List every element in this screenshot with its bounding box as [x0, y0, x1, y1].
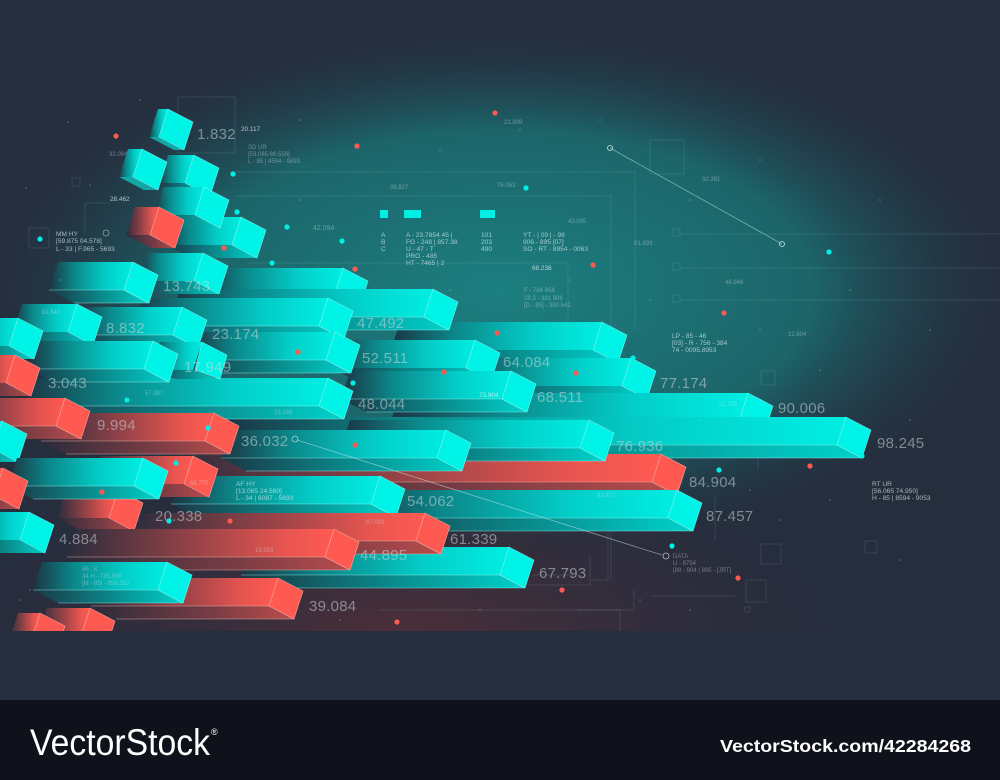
value labels: 19.583: [255, 548, 274, 554]
small labels: 28.462: [110, 196, 130, 203]
small labels: L - 85 | 4594 - 9893: [248, 159, 301, 165]
value labels: 39.084: [309, 598, 356, 615]
small labels: RT UR: [872, 481, 892, 488]
bar 36.032: [221, 430, 471, 471]
text block: data table: 490: [481, 246, 492, 253]
value labels: [M - 85] - 896.552: [82, 581, 130, 587]
bar 81.643: [18, 304, 102, 341]
small labels: 21.899: [504, 120, 523, 126]
text block: data table: HT - 7465 | 2: [406, 260, 445, 267]
value labels: 54.062: [407, 493, 454, 510]
value labels: 1.832: [197, 126, 236, 143]
value labels: 9.994: [97, 417, 136, 434]
cube stack 2: [119, 149, 167, 190]
value labels: [13.065 24.560]: [236, 488, 282, 495]
cube stack 4: [154, 187, 229, 228]
bar rear upper short: [166, 217, 266, 258]
bottom red bar 1: [38, 608, 115, 649]
value labels: 61.339: [450, 531, 497, 548]
footer bar: [0, 700, 1000, 780]
bar 47.492: [171, 289, 458, 330]
value labels: 34 H - 785.906: [82, 574, 122, 580]
value labels: 67.003: [366, 520, 385, 526]
red data dots: [99, 110, 813, 625]
small labels: L - 33 | F.965 - 5693: [56, 246, 115, 253]
connector line data callout: [103, 230, 669, 559]
value labels: 13.743: [163, 278, 210, 295]
cyan data dots: [37, 171, 865, 549]
value labels: 52.511: [362, 350, 408, 367]
value labels: 81.643: [42, 310, 61, 316]
bar 3.043 top: [28, 341, 178, 382]
bar rear upper: [221, 268, 368, 289]
value labels: 84.904: [689, 474, 736, 491]
small labels: LP - 85 - 46: [672, 333, 707, 340]
small labels: 32.261: [702, 177, 721, 183]
value labels: 67.793: [539, 565, 586, 582]
value labels: 57.997: [145, 391, 164, 397]
small labels: DATA: [673, 554, 688, 560]
small labels: 74 - 0095.8953: [672, 347, 717, 354]
small labels: MM HY: [56, 231, 79, 238]
bar 20: [394, 322, 628, 358]
footer registered mark: ®: [211, 727, 218, 737]
red cube: [126, 207, 184, 248]
small labels: SD UR: [248, 145, 267, 151]
value labels: 90.006: [778, 400, 825, 417]
red cube left edge: [0, 355, 40, 396]
text block: data table: 101: [481, 232, 492, 239]
bar 54.062: [171, 476, 405, 517]
small labels: [53.085 86.550]: [248, 152, 290, 158]
bar 48.044: [24, 378, 353, 419]
value labels: 47.492: [357, 315, 404, 332]
footer logo: VectorStock: [30, 722, 210, 763]
small labels: 46.948: [725, 280, 744, 286]
cube stack 3: [159, 155, 219, 196]
bar 13.743: [139, 253, 228, 294]
text block: data table: 203: [481, 239, 492, 246]
bar 87.457: [398, 490, 702, 532]
bar 46-K: [33, 562, 192, 603]
value labels: 64.084: [503, 354, 550, 371]
value labels: AF HY: [236, 481, 256, 488]
small labels: 68.238: [532, 265, 552, 272]
small labels: U - 8754: [673, 561, 697, 567]
text block: data table: C: [381, 246, 386, 253]
small labels: 36.827: [390, 185, 409, 191]
text block: data table: FG - 248 | 857.38: [406, 239, 458, 246]
bar 76.936: [341, 420, 614, 461]
bar 61.339 red: [131, 513, 450, 554]
small labels: 32.094: [109, 152, 128, 158]
text block: data table: U - 47 - T: [406, 246, 434, 253]
chart: isometric 3D bars: [0, 109, 871, 654]
cyan front bar: [8, 458, 168, 499]
red bar left: [0, 398, 90, 439]
bar 90.006: [392, 392, 774, 417]
bar left upper: [49, 262, 158, 303]
speckle particles: [19, 99, 931, 621]
value labels: [42, 126, 924, 615]
red cube left edge 2: [0, 468, 28, 509]
small labels: 28.3 - 381 906: [524, 296, 563, 302]
value labels: 23.174: [212, 326, 259, 343]
value labels: 87.457: [706, 508, 753, 525]
small labels: [89 - 904 | 895 - [JRT]: [673, 568, 731, 574]
small labels: [56, 120, 931, 574]
value labels: 66.775: [190, 481, 209, 487]
value labels: 17.949: [184, 359, 231, 376]
bar 9.994 red: [41, 413, 239, 454]
small labels: 61.893: [634, 241, 653, 247]
footer url: VectorStock.com/42284268: [720, 736, 971, 756]
small labels: 20.117: [241, 126, 261, 133]
small labels: 43.005: [568, 219, 587, 225]
value labels: 77.174: [660, 375, 707, 392]
text block: data table: B: [381, 239, 386, 246]
bar 52.511: [191, 332, 360, 373]
value labels: 48.044: [358, 396, 405, 413]
value labels: 73.904: [479, 392, 499, 399]
value labels: 63.972: [597, 493, 616, 499]
small labels: [D - 85] - 300 542: [524, 303, 571, 309]
bar 8.832: [78, 307, 207, 348]
small labels: 42.094: [313, 225, 335, 232]
text block: data table: A - 23.7854 45 |: [406, 232, 453, 239]
bar 64.084: [341, 340, 500, 377]
cube left edge 3: [0, 512, 54, 553]
text block: data table: A: [381, 232, 386, 239]
cube left edge 2: [0, 421, 27, 462]
bar short red: [91, 456, 218, 497]
text block: data table: YT - | 09 | - 98: [523, 232, 565, 239]
bar 20.338 red: [58, 499, 144, 529]
small labels: 76.063: [497, 183, 516, 189]
small labels: [59.875 04.578]: [56, 238, 102, 245]
bar 84.904 red: [161, 454, 686, 495]
connector line top right: [608, 146, 784, 246]
bar 17.949: [151, 342, 227, 379]
value labels: 23.168: [274, 410, 293, 416]
small labels: 12.804: [788, 332, 807, 338]
bar 23.174: [134, 298, 353, 339]
bottom red bar 2: [9, 613, 65, 654]
bar 98.245: [221, 417, 871, 458]
bar 4.884 red: [67, 529, 359, 570]
value labels: 44.895: [360, 547, 407, 564]
value labels: 68.511: [537, 389, 583, 406]
circuit frames and grid lines: [29, 97, 1000, 631]
value labels: 20.338: [155, 508, 202, 525]
value labels: 4.884: [59, 531, 98, 548]
text block: data table: [380, 210, 588, 267]
bar 67.793: [241, 547, 534, 588]
bar 68.511: [341, 371, 536, 412]
text block: data table: SO - RT - 8954 - 0063: [523, 246, 588, 253]
text block: data table: 906 - 895 [07]: [523, 239, 564, 246]
small labels: F - 784 958: [524, 288, 555, 294]
text block: data table: PRO - 485: [406, 253, 437, 260]
cube stack 1: [149, 109, 193, 150]
value labels: 46 - K: [82, 567, 98, 573]
value labels: L - 34 | 6087 - 5693: [236, 495, 294, 502]
value labels: 76.936: [616, 438, 663, 455]
bar 77.174: [494, 358, 656, 393]
value labels: 98.245: [877, 435, 924, 452]
value labels: 8.832: [106, 320, 145, 337]
small labels: H - 85 | 8594 - 9053: [872, 495, 931, 502]
bar 39.084 red: [91, 578, 303, 619]
small labels: [03] - R - 756 - 384: [672, 340, 728, 347]
value labels: 51.782: [719, 402, 738, 408]
cube left edge: [0, 318, 43, 359]
value labels: 36.032: [241, 433, 288, 450]
small labels: [56.065 74.950]: [872, 488, 918, 495]
value labels: 3.043: [48, 375, 87, 392]
